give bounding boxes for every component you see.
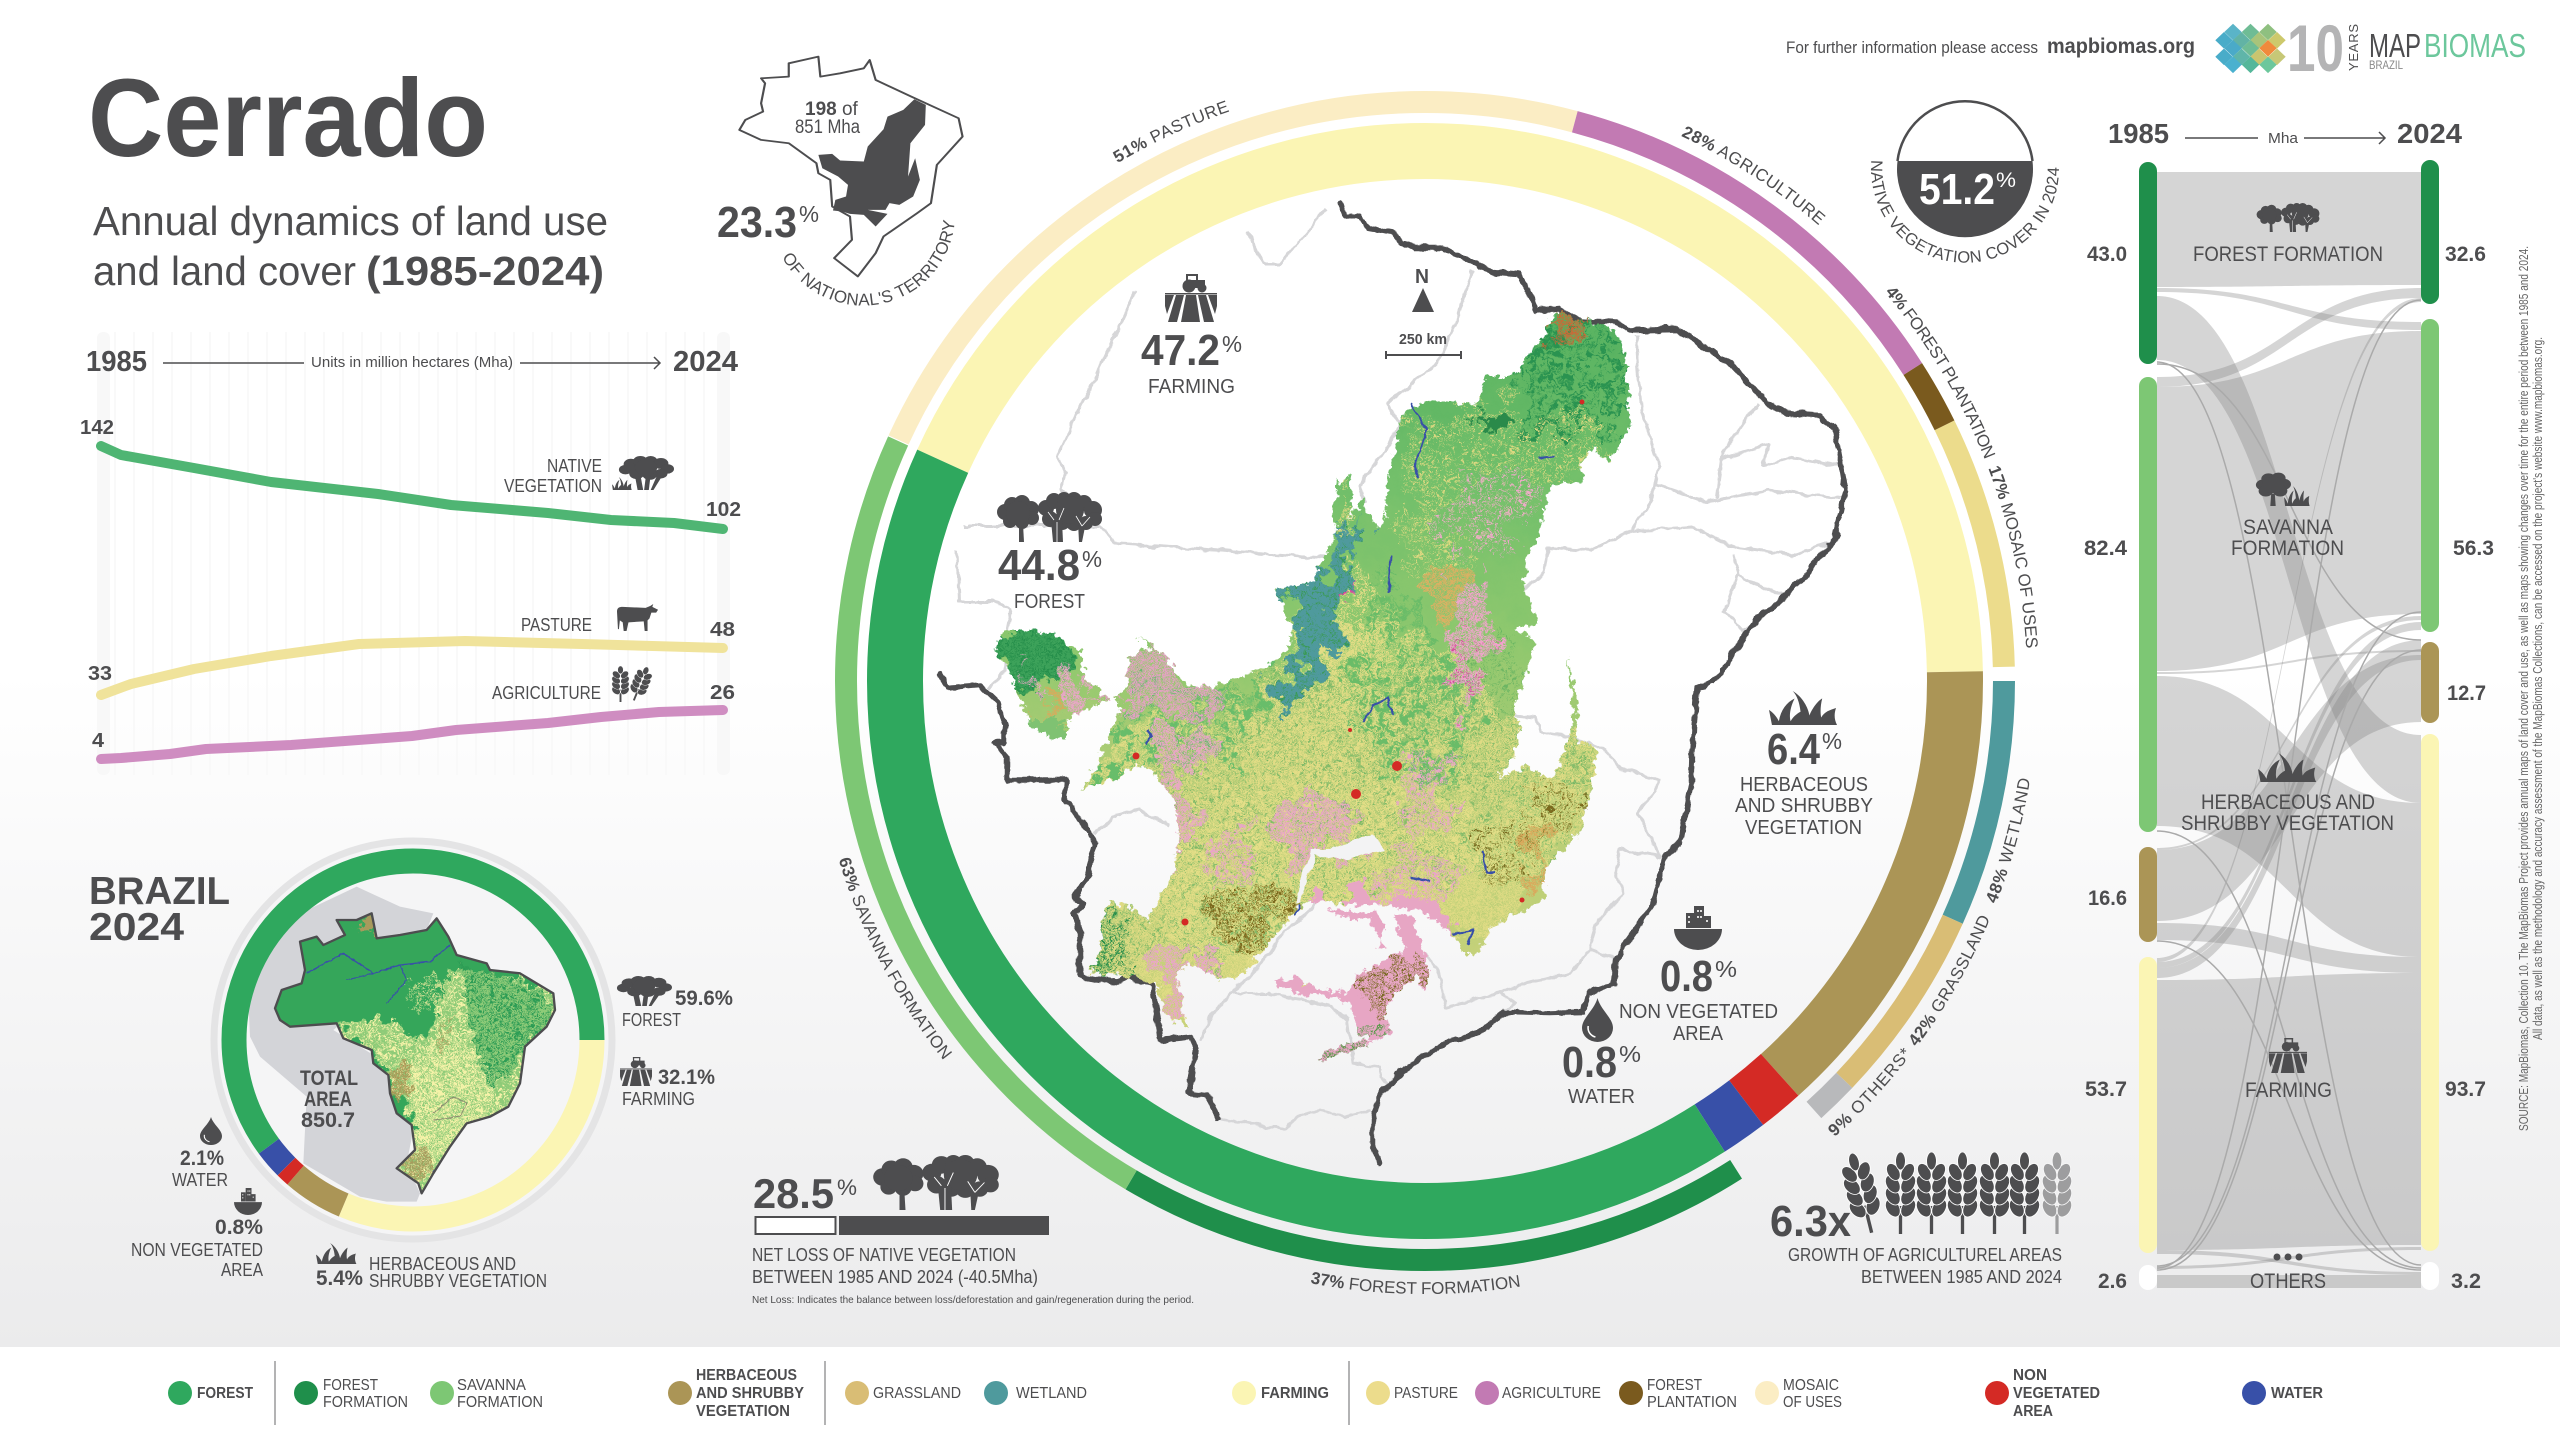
sankey diagram: OTHERS xyxy=(2250,1270,2326,1293)
line chart: land use over time: AGRICULTURE xyxy=(492,683,601,703)
header link xyxy=(1786,35,2195,58)
Brazil label: herbaceous: 5.4% xyxy=(316,1267,363,1290)
line chart: land use over time: VEGETATION xyxy=(504,476,602,496)
agriculture growth callout: 6.3x xyxy=(1770,1197,1851,1246)
sankey diagram: 12.7 xyxy=(2447,682,2486,705)
source note xyxy=(2516,246,2545,1131)
main ring chart xyxy=(846,102,2004,1260)
source note: All data, as well as the methodology and accuracy assessment of the MapBiomas Collections, can be accessed on the project's website www.mapbiomas.org. xyxy=(2530,337,2545,1040)
inset: Brazil locator map with share of territory: 23.3 xyxy=(717,198,797,247)
sankey diagram: SHRUBBY VEGETATION xyxy=(2181,812,2394,835)
legend: MOSAIC xyxy=(1783,1377,1839,1394)
native vegetation gauge: 51.2 xyxy=(1919,165,1995,214)
Brazil label: water xyxy=(172,1117,228,1190)
sankey diagram: 16.6 xyxy=(2088,887,2127,910)
Brazil label: forest xyxy=(617,976,733,1030)
legend: FORMATION xyxy=(323,1394,408,1411)
logo: MAP xyxy=(2369,27,2421,64)
Brazil label: farming: 32.1% xyxy=(658,1066,715,1089)
big stat: forest: FOREST xyxy=(1014,591,1085,613)
legend: PASTURE xyxy=(1394,1385,1458,1402)
legend: FOREST xyxy=(1647,1377,1702,1394)
net loss callout: BETWEEN 1985 AND 2024 (-40.5Mha) xyxy=(752,1267,1038,1287)
logo: YEARS xyxy=(2346,24,2361,71)
inset: Brazil locator map with share of territory xyxy=(717,56,964,306)
big stat: herbaceous: VEGETATION xyxy=(1745,817,1862,839)
line chart: land use over time xyxy=(80,332,741,775)
Brazil 2024 heading: 2024 xyxy=(89,906,184,949)
legend: NON xyxy=(2013,1367,2047,1384)
agriculture growth callout: BETWEEN 1985 AND 2024 xyxy=(1861,1267,2062,1287)
logo: BIOMAS xyxy=(2424,27,2526,64)
big stat: forest xyxy=(997,492,1102,613)
ring labels xyxy=(840,100,2038,1294)
big stat: non vegetated area: NON VEGETATED xyxy=(1619,1001,1778,1023)
sankey diagram: 56.3 xyxy=(2453,537,2494,560)
line chart: land use over time: 102 xyxy=(706,499,741,521)
Brazil donut with land cover map: 850.7 xyxy=(301,1109,355,1132)
Brazil 2024 heading: BRAZIL xyxy=(89,870,230,913)
legend: FOREST xyxy=(323,1377,378,1394)
state borders on base map xyxy=(957,209,1840,1130)
source note: SOURCE: MapBiomas, Collection 10. The MapBiomas Project provides annual maps of land cover and use, as well as maps showing changes over time for the entire period between 1985 and 2024. xyxy=(2516,246,2531,1131)
sankey diagram: 2.6 xyxy=(2098,1270,2127,1293)
Brazil donut with land cover map: AREA xyxy=(304,1088,352,1111)
Brazil label: water: WATER xyxy=(172,1170,228,1190)
Brazil label: non vegetated: AREA xyxy=(221,1260,263,1280)
Brazil label: farming: FARMING xyxy=(622,1089,695,1109)
legend: FARMING xyxy=(1261,1385,1329,1402)
line chart: land use over time: NATIVE xyxy=(547,456,602,476)
ring labels: 63% SAVANNA FORMATION xyxy=(840,858,952,1060)
inset: Brazil locator map with share of territory: 198 of xyxy=(805,99,859,120)
legend: VEGETATED xyxy=(2013,1385,2100,1402)
inset: Brazil locator map with share of territory: OF NATIONAL'S TERRITORY xyxy=(784,220,954,306)
Brazil label: water: 2.1% xyxy=(180,1147,224,1170)
sankey diagram: 2024 xyxy=(2397,118,2462,149)
ring labels: 42% GRASSLAND xyxy=(1910,916,1988,1046)
legend: VEGETATION xyxy=(696,1403,790,1420)
native vegetation gauge: % xyxy=(1996,169,2016,192)
Brazil label: farming xyxy=(620,1057,715,1109)
header link: mapbiomas.org xyxy=(2047,35,2195,58)
logo: 10 xyxy=(2287,11,2344,85)
net loss callout: % xyxy=(837,1175,857,1200)
net loss callout: Net Loss: Indicates the balance between loss/deforestation and gain/regeneration during the period. xyxy=(752,1294,1194,1306)
sankey diagram: FORMATION xyxy=(2231,537,2344,560)
map details: water, urban areas, reservoirs xyxy=(1132,400,1584,945)
Brazil label: non vegetated: NON VEGETATED xyxy=(131,1240,263,1260)
Brazil label: non vegetated xyxy=(131,1188,263,1280)
subtitle: (1985-2024) xyxy=(366,248,604,294)
legend xyxy=(168,1361,2323,1425)
sankey diagram: FARMING xyxy=(2245,1079,2332,1102)
legend: GRASSLAND xyxy=(873,1385,961,1402)
legend: HERBACEOUS xyxy=(696,1367,797,1384)
north arrow and scale bar xyxy=(1386,266,1461,359)
logo: BRAZIL xyxy=(2369,58,2403,72)
sankey diagram: HERBACEOUS AND xyxy=(2201,791,2375,814)
legend: SAVANNA xyxy=(457,1377,526,1394)
line chart: land use over time: 48 xyxy=(710,619,735,641)
big stat: herbaceous: AND SHRUBBY xyxy=(1735,795,1873,817)
header link: For further information please access xyxy=(1786,38,2038,57)
Brazil donut with land cover map: TOTAL xyxy=(300,1067,358,1090)
line chart: land use over time: 1985 xyxy=(86,346,147,378)
line chart: land use over time: Units in million hectares (Mha) xyxy=(311,354,513,371)
Brazil label: herbaceous: HERBACEOUS AND xyxy=(369,1254,516,1274)
ring labels: 37% FOREST FORMATION xyxy=(1311,1272,1520,1294)
ring labels: 4% FOREST PLANTATION xyxy=(1886,288,1996,458)
sankey diagram: 82.4 xyxy=(2084,537,2127,560)
sankey diagram: Mha xyxy=(2268,130,2299,147)
logo xyxy=(2215,11,2526,85)
big stat: farming: % xyxy=(1222,331,1242,357)
sankey diagram: 93.7 xyxy=(2445,1078,2486,1101)
Brazil label: forest: FOREST xyxy=(622,1010,681,1030)
Brazil label: herbaceous: SHRUBBY VEGETATION xyxy=(369,1271,547,1291)
legend: OF USES xyxy=(1783,1394,1842,1411)
big stat: forest: 44.8 xyxy=(998,541,1080,590)
big stat: herbaceous: HERBACEOUS xyxy=(1740,774,1868,796)
Brazil donut with land cover map xyxy=(214,841,612,1239)
subtitle: and land cover xyxy=(93,248,356,294)
net loss callout: NET LOSS OF NATIVE VEGETATION xyxy=(752,1245,1016,1265)
line chart: land use over time: PASTURE xyxy=(521,615,592,635)
legend: AREA xyxy=(2013,1403,2053,1420)
sankey diagram: FOREST FORMATION xyxy=(2193,243,2383,266)
big stat: farming: 47.2 xyxy=(1141,326,1220,375)
Brazil label: herbaceous xyxy=(316,1243,547,1291)
sankey diagram: 53.7 xyxy=(2085,1078,2127,1101)
line chart: land use over time: 142 xyxy=(80,417,114,439)
land cover map of the Cerrado xyxy=(994,310,1633,1062)
ring labels: 28% AGRICULTURE xyxy=(1681,126,1826,225)
Brazil label: non vegetated: 0.8% xyxy=(215,1216,263,1239)
sankey diagram: 32.6 xyxy=(2445,243,2486,266)
big stat: herbaceous: 6.4 xyxy=(1767,725,1820,774)
inset: Brazil locator map with share of territory: 851 Mha xyxy=(795,117,860,138)
big stat: forest: % xyxy=(1082,546,1102,572)
sankey diagram: 3.2 xyxy=(2451,1270,2481,1293)
big stat: non vegetated area: AREA xyxy=(1673,1023,1724,1045)
line chart: land use over time: 33 xyxy=(88,663,112,685)
ring labels: 9% OTHERS* xyxy=(1828,1048,1906,1136)
subtitle xyxy=(93,198,608,294)
legend band xyxy=(0,1347,2560,1438)
legend: FOREST xyxy=(197,1385,253,1402)
net loss callout: 28.5 xyxy=(753,1170,834,1217)
legend: WETLAND xyxy=(1016,1385,1087,1402)
north arrow and scale bar: 250 km xyxy=(1399,331,1447,348)
sankey diagram: 43.0 xyxy=(2087,243,2127,266)
big stat: water xyxy=(1562,998,1641,1108)
ring labels: 17% MOSAIC OF USES xyxy=(1988,466,2038,648)
big stat: water: % xyxy=(1619,1041,1641,1067)
title: Cerrado xyxy=(88,57,488,180)
big stat: farming: FARMING xyxy=(1148,376,1235,398)
legend: PLANTATION xyxy=(1647,1394,1737,1411)
agriculture growth callout xyxy=(1770,1149,2075,1287)
line chart: land use over time: 4 xyxy=(92,730,105,752)
big stat: water: 0.8 xyxy=(1562,1038,1617,1087)
big stat: herbaceous xyxy=(1735,691,1873,839)
legend: FORMATION xyxy=(457,1394,543,1411)
big stat: non vegetated area: 0.8 xyxy=(1660,952,1713,1001)
legend: AGRICULTURE xyxy=(1502,1385,1601,1402)
legend: AND SHRUBBY xyxy=(696,1385,804,1402)
sankey diagram: SAVANNA xyxy=(2243,516,2333,539)
Brazil 2024 heading xyxy=(89,870,230,949)
north arrow and scale bar: N xyxy=(1415,266,1429,288)
agriculture growth callout: GROWTH OF AGRICULTUREL AREAS xyxy=(1788,1245,2062,1265)
big stat: water: WATER xyxy=(1568,1086,1635,1108)
big stat: non vegetated area xyxy=(1619,906,1778,1045)
big stat: non vegetated area: % xyxy=(1715,956,1737,982)
inset: Brazil locator map with share of territory: % xyxy=(799,201,819,227)
Brazil label: forest: 59.6% xyxy=(675,987,733,1010)
native vegetation gauge xyxy=(1870,100,2059,263)
big stat: herbaceous: % xyxy=(1822,728,1842,754)
line chart: land use over time: 26 xyxy=(710,682,735,704)
ring labels: 48% WETLAND xyxy=(1987,778,2030,903)
big stat: farming xyxy=(1141,274,1242,398)
subtitle: Annual dynamics of land use xyxy=(93,198,608,244)
line chart: land use over time: 2024 xyxy=(673,346,738,378)
net loss callout xyxy=(752,1155,1194,1306)
sankey diagram: 1985 xyxy=(2108,118,2169,149)
Brazil border outline xyxy=(939,204,1845,1162)
sankey diagram xyxy=(2084,118,2494,1293)
ring labels: 51% PASTURE xyxy=(1112,100,1230,162)
legend: WATER xyxy=(2271,1385,2323,1402)
native vegetation gauge: NATIVE VEGETATION COVER IN 2024 xyxy=(1870,161,2059,263)
